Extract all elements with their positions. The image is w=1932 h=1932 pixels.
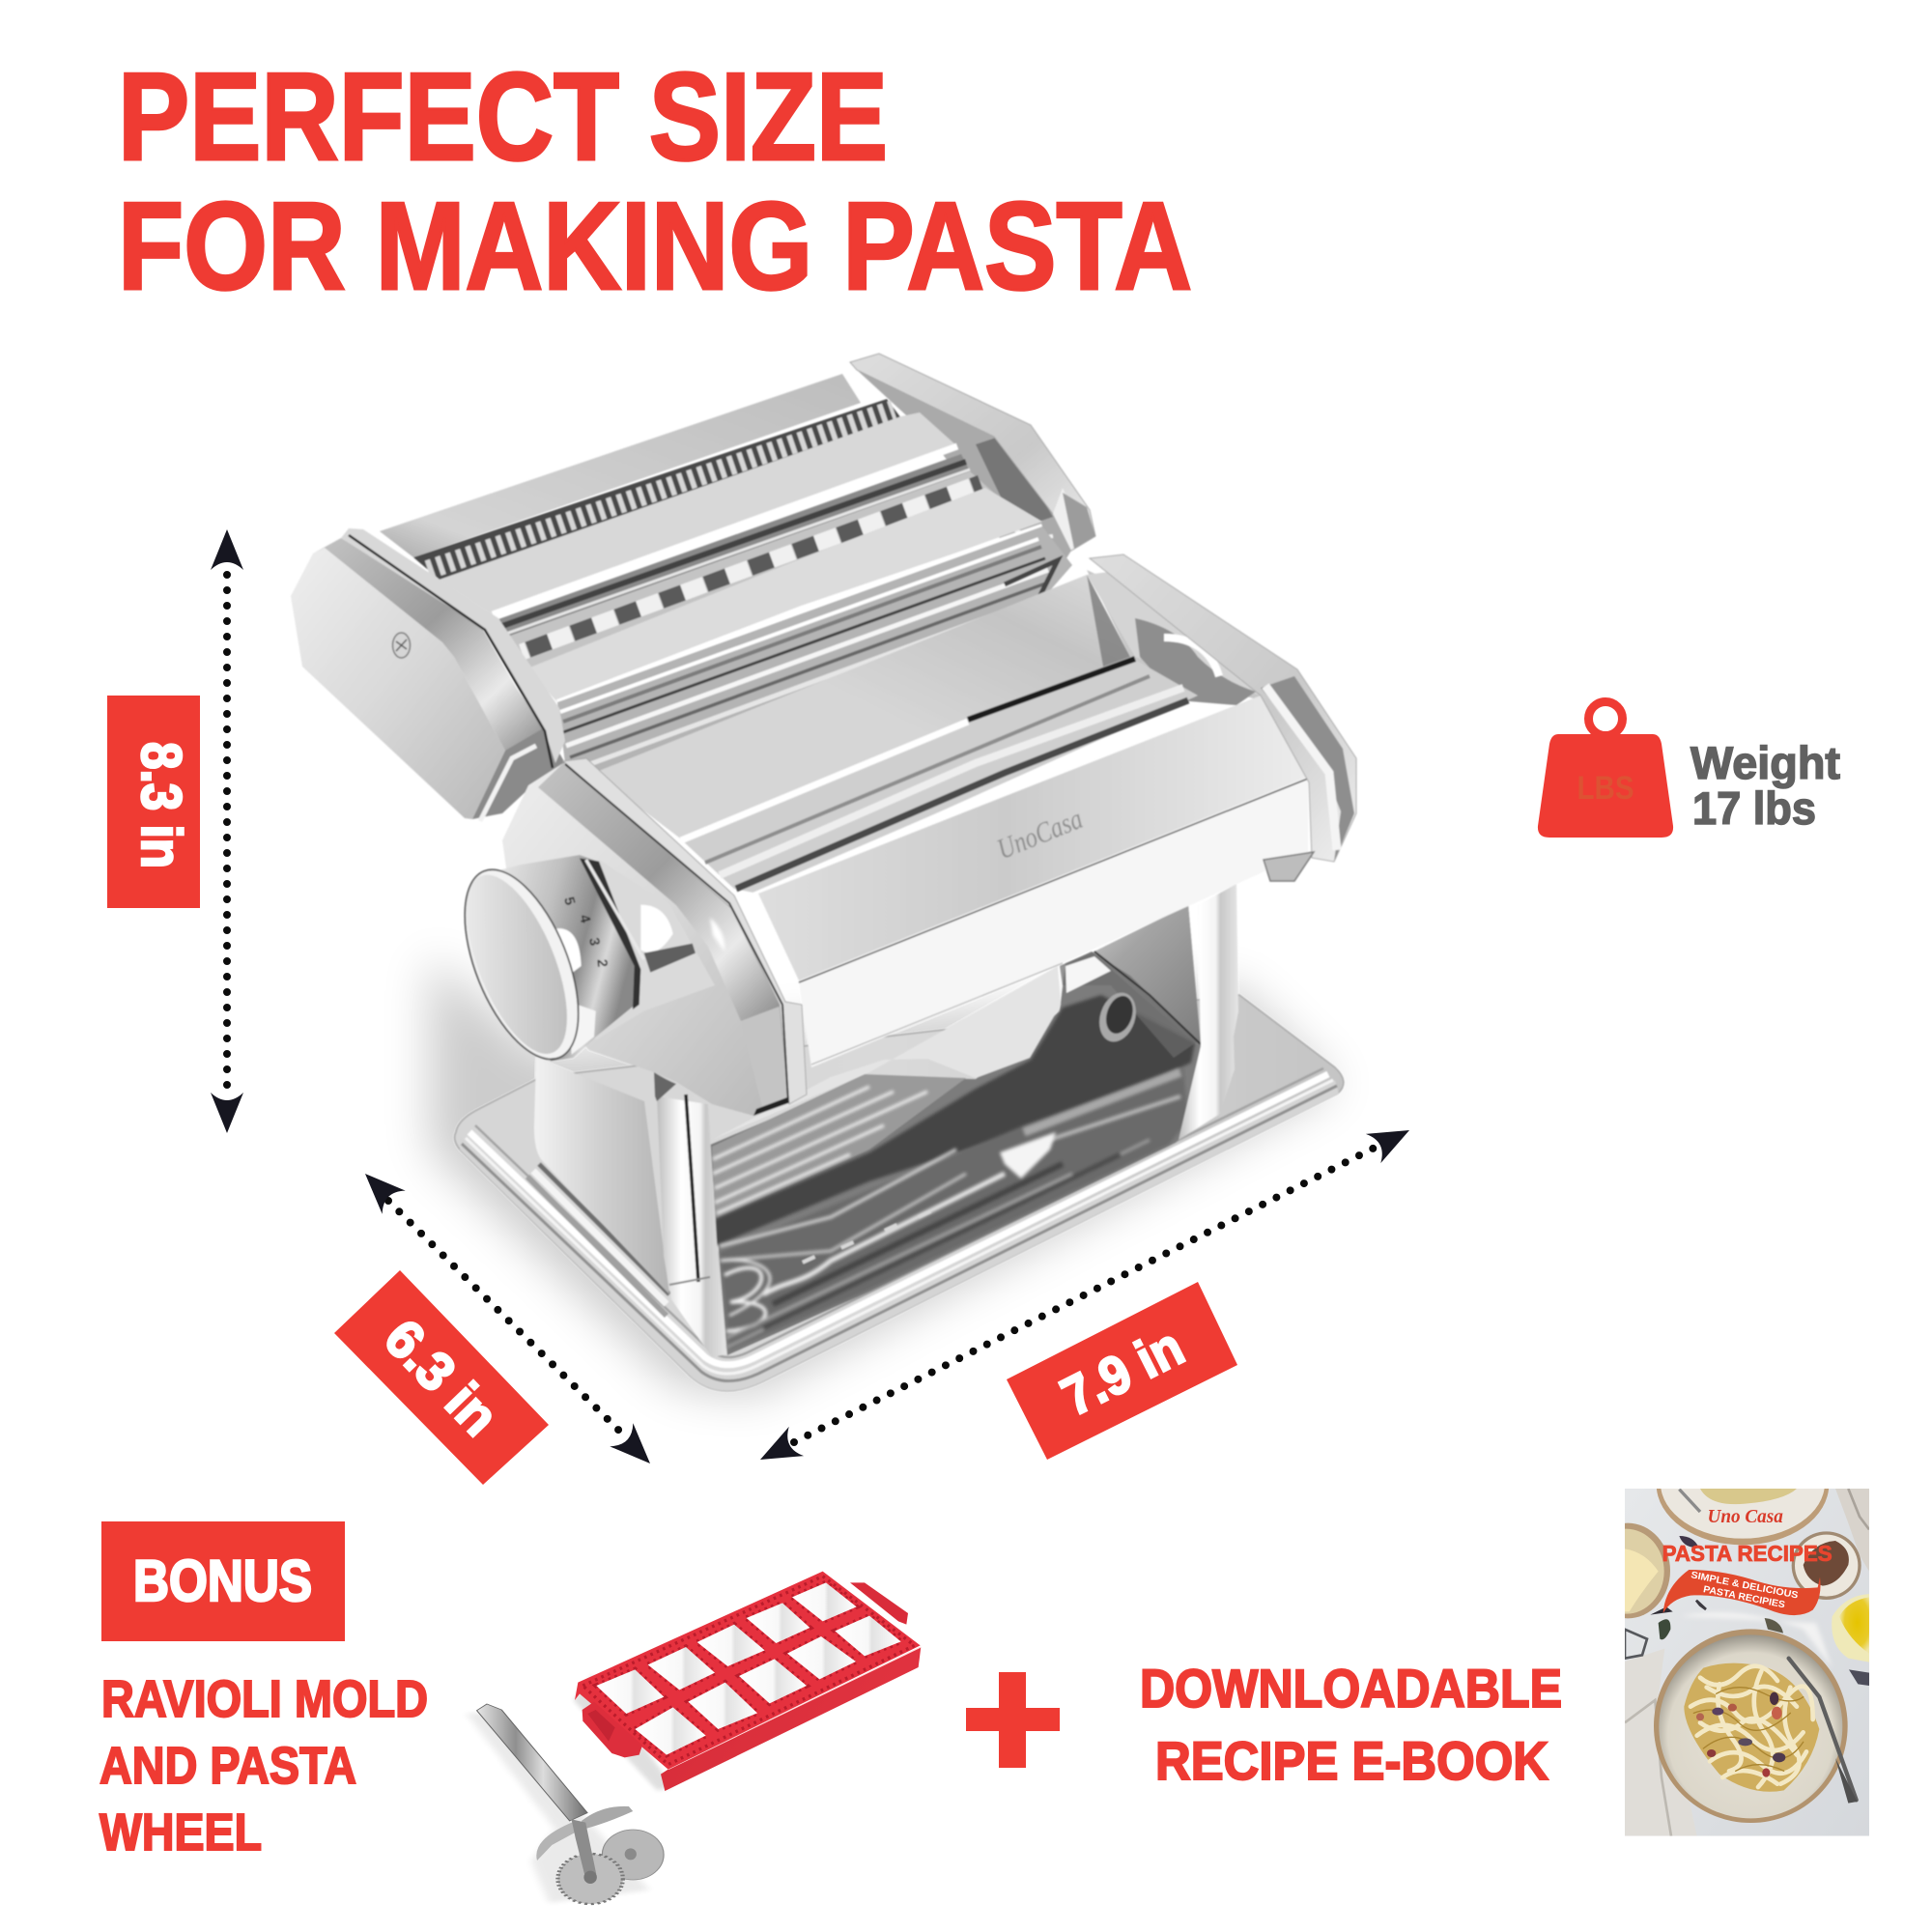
skirt bbox=[472, 727, 565, 819]
knob cap bbox=[446, 862, 587, 1067]
depth label bbox=[334, 1270, 549, 1485]
ebook logo: Uno Casa bbox=[1707, 1506, 1783, 1527]
bonus badge bbox=[101, 1521, 345, 1641]
height dimension arrow bbox=[211, 529, 243, 1133]
interior reflection bbox=[710, 905, 1201, 1355]
basil leaves bbox=[1679, 1536, 1698, 1548]
handle: left bbox=[582, 1702, 642, 1757]
dial numbers bbox=[560, 895, 610, 968]
left end plate bbox=[291, 528, 565, 821]
upper head right collar bbox=[850, 354, 1095, 551]
weight text: 17 lbs bbox=[1692, 782, 1816, 834]
height label bbox=[107, 696, 200, 908]
bonus item text: AND PASTA bbox=[99, 1737, 356, 1795]
fluted wheel bbox=[557, 1854, 623, 1904]
mold cells bbox=[596, 1582, 901, 1755]
front post bbox=[657, 1094, 726, 1357]
banner: PASTA RECIPIES bbox=[1702, 1584, 1786, 1610]
dial numbers: 5 bbox=[560, 895, 578, 907]
banner: SIMPLE & DELICIOUS bbox=[1690, 1570, 1800, 1602]
towel bbox=[1835, 1489, 1869, 1572]
bonus badge: BONUS bbox=[133, 1548, 312, 1613]
screw bbox=[392, 633, 410, 658]
ebook text: RECIPE E-BOOK bbox=[1155, 1730, 1548, 1791]
mold side bbox=[661, 1647, 921, 1791]
depth dimension arrow bbox=[354, 1162, 662, 1475]
main roller head bbox=[502, 554, 1356, 1116]
weight text bbox=[1690, 737, 1840, 834]
checker strip bbox=[505, 471, 1005, 668]
pasta machine photo bbox=[291, 354, 1356, 1396]
back plate bbox=[380, 374, 861, 557]
width label bbox=[1007, 1282, 1237, 1460]
ravioli mold bbox=[573, 1572, 921, 1791]
depth label: 6.3 in bbox=[373, 1307, 511, 1447]
dial numbers: 4 bbox=[576, 913, 593, 925]
ingredients bbox=[1770, 1692, 1778, 1705]
cast shadow bbox=[430, 956, 1338, 1396]
dial numbers: 3 bbox=[585, 937, 602, 947]
handle bbox=[477, 1704, 587, 1821]
guard blades bbox=[582, 1806, 633, 1829]
dial numbers: 2 bbox=[593, 958, 610, 968]
adjustment knob bbox=[441, 854, 715, 1074]
right collar inner reflection bbox=[1087, 570, 1297, 700]
icon: weight: LBS bbox=[1577, 770, 1634, 807]
left side wall bbox=[534, 1058, 669, 1294]
left end housing bbox=[502, 758, 807, 1116]
rollers below cutter bbox=[557, 526, 1072, 776]
right collar interior bbox=[857, 370, 1071, 594]
stripe band bbox=[498, 454, 971, 638]
knob rim bbox=[441, 854, 602, 1074]
cheese bowl bbox=[1625, 1522, 1670, 1619]
fork arm bbox=[572, 1819, 596, 1874]
base plate bbox=[455, 995, 1344, 1391]
smooth wheel bbox=[602, 1830, 664, 1880]
upper cutter head bbox=[291, 354, 1095, 821]
title: PERFECT SIZE bbox=[118, 47, 888, 186]
ebook text: DOWNLOADABLE bbox=[1140, 1658, 1562, 1719]
top plate bbox=[1656, 1489, 1830, 1546]
napkin bbox=[1625, 1649, 1697, 1836]
ebook text bbox=[1140, 1658, 1562, 1791]
ebook cover bbox=[1625, 1489, 1869, 1836]
pasta wheel bbox=[467, 1704, 664, 1904]
cutter block top bbox=[440, 412, 957, 614]
barrel bbox=[486, 855, 639, 1061]
bonus item text: WHEEL bbox=[99, 1804, 262, 1861]
right end collar bbox=[1090, 554, 1356, 881]
front upper panel bbox=[758, 696, 1308, 980]
width label: 7.9 in bbox=[1052, 1316, 1193, 1427]
bonus item text: RAVIOLI MOLD bbox=[101, 1670, 428, 1728]
collar hinge bracket bbox=[654, 1072, 676, 1101]
weight text: Weight bbox=[1690, 737, 1840, 788]
handle: right bbox=[850, 1582, 908, 1625]
width dimension arrow bbox=[753, 1116, 1417, 1474]
jar clamp bbox=[1625, 1630, 1647, 1659]
rollers bbox=[679, 657, 1198, 894]
plus sign bbox=[966, 1672, 1060, 1768]
right post bbox=[1179, 884, 1238, 1140]
main plate bbox=[1654, 1629, 1848, 1823]
mold top bbox=[575, 1572, 921, 1770]
bevel bbox=[313, 538, 545, 753]
front lower panel bbox=[799, 777, 1308, 1067]
fork bbox=[1789, 1659, 1857, 1800]
title: FOR MAKING PASTA bbox=[118, 177, 1192, 316]
collar strip bbox=[341, 528, 565, 763]
banner bbox=[1663, 1570, 1821, 1615]
bonus item text bbox=[99, 1670, 428, 1861]
logo on body: UnoCasa bbox=[993, 803, 1087, 866]
spaghetti bbox=[1684, 1663, 1819, 1792]
knob housing bump bbox=[573, 860, 715, 1040]
cutter block lower bbox=[527, 488, 1042, 702]
oil jar bbox=[1832, 1594, 1869, 1662]
cutter teeth wide bbox=[413, 399, 901, 580]
title bbox=[118, 47, 1192, 316]
height label: 8.3 in bbox=[129, 742, 192, 868]
icon: weight bbox=[1538, 701, 1673, 838]
hopper panel bbox=[594, 575, 1130, 838]
screw hole bbox=[1094, 988, 1142, 1046]
spice bowl bbox=[1792, 1531, 1861, 1600]
ebook title: PASTA RECIPES bbox=[1662, 1541, 1833, 1566]
